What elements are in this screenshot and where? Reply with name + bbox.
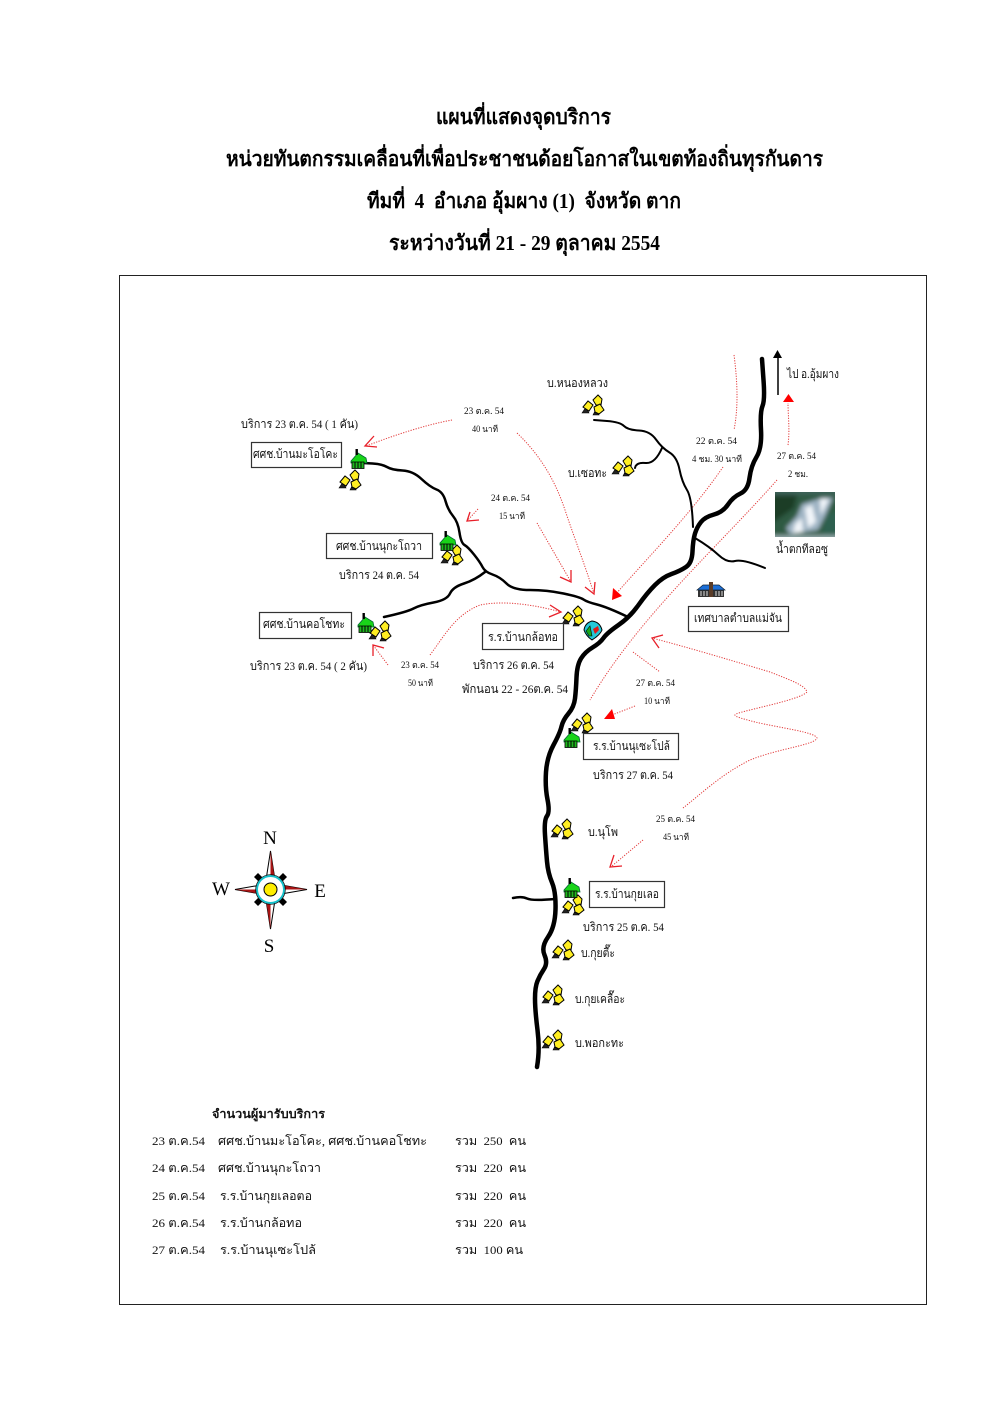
table row 27 Oct: ร.ร.บ้านนุเซะโปล้ <box>220 1243 316 1258</box>
icon: tent <box>584 621 602 640</box>
table heading: number of patients: จำนวนผู้มารับบริการ <box>212 1107 326 1122</box>
label box: Baan Nuka Thowa <box>326 534 432 558</box>
label: service 23 Oct car 1: บริการ 23 ต.ค. 54 ( 1 คัน) <box>241 417 358 431</box>
branch road: south west <box>513 897 555 900</box>
label box: Baan Klo Tho school: ร.ร.บ้านกล้อทอ <box>488 630 558 644</box>
village name labels: บ.พอกะทะ <box>575 1036 624 1050</box>
table row 23 Oct <box>152 1134 526 1148</box>
label: service 26 Oct: บริการ 26 ต.ค. 54 <box>473 658 554 672</box>
title <box>226 101 824 257</box>
travel time labels: 50 นาที <box>408 678 433 688</box>
travel time labels: 45 นาที <box>663 832 689 842</box>
title: แผนที่แสดงจุดบริการ <box>436 101 612 131</box>
table row 26 Oct: รวม 220 คน <box>455 1216 526 1230</box>
icon: municipal building <box>697 582 725 597</box>
label: waterfall: น้ำตกทีลอซู <box>776 540 828 557</box>
label box: Baan Ma O Kho <box>252 442 342 468</box>
label box: Baan Kho Cho Tha: ศศช.บ้านคอโชทะ <box>263 617 345 631</box>
label box: Baan Ma O Kho: ศศช.บ้านมะโอโคะ <box>253 447 338 461</box>
label box: Baan Nu Che Plo school: ร.ร.บ้านนุเซะโปล้ <box>593 739 670 754</box>
red dotted travel routes <box>365 355 817 867</box>
label box: Baan Klo Tho school <box>482 624 564 650</box>
arrow: to Umphang <box>773 350 782 395</box>
table row 27 Oct <box>152 1243 523 1258</box>
travel time labels: 24 ต.ค. 54 <box>491 493 530 503</box>
travel time labels: 23 ต.ค. 54 <box>401 660 439 670</box>
table row 27 Oct: รวม 100 คน <box>455 1243 523 1257</box>
icons: green clinic houses <box>351 449 580 898</box>
title: ระหว่างวันที่ 21 - 29 ตุลาคม 2554 <box>389 227 660 257</box>
branch road: Ban Soe Tha <box>635 448 662 468</box>
travel time labels: 27 ต.ค. 54 <box>777 451 816 461</box>
icons: village tents <box>339 395 634 1050</box>
branch road: to Baan Kho Cho Tha <box>384 572 485 617</box>
label box: Baan Nuka Thowa: ศศช.บ้านนุกะโถวา <box>336 539 422 554</box>
table row 25 Oct: ร.ร.บ้านกุยเลอตอ <box>220 1189 312 1204</box>
travel time labels: 25 ต.ค. 54 <box>656 814 695 824</box>
village name labels: บ.หนองหลวง <box>547 376 608 390</box>
travel time labels: 23 ต.ค. 54 <box>464 406 505 416</box>
label: service 25 Oct: บริการ 25 ต.ค. 54 <box>583 920 664 934</box>
label box: Baan Nu Che Plo school <box>584 734 678 760</box>
table row 24 Oct: รวม 220 คน <box>455 1161 526 1175</box>
table row 24 Oct <box>152 1161 526 1176</box>
label box: Baan Kho Cho Tha <box>260 612 352 638</box>
travel time labels <box>401 406 816 842</box>
icon: compass rose <box>212 828 326 957</box>
table row 26 Oct: 26 ต.ค.54 <box>152 1216 205 1230</box>
label box: Mae Chan municipality: เทศบาลตำบลแม่จัน <box>694 611 782 625</box>
label: service 23 Oct car 2: บริการ 23 ต.ค. 54 ( 2 คัน) <box>250 659 367 673</box>
table row 25 Oct: รวม 220 คน <box>455 1189 526 1203</box>
icon: compass rose: E <box>314 881 326 902</box>
panel: map frame <box>120 276 926 1304</box>
label box: Baan Kui Loe school <box>590 882 664 908</box>
travel time labels: 22 ต.ค. 54 <box>696 436 738 446</box>
table row 23 Oct: รวม 250 คน <box>455 1134 526 1148</box>
table row 25 Oct <box>152 1189 526 1204</box>
table row 24 Oct: ศศช.บ้านนุกะโถวา <box>218 1161 321 1176</box>
picture: waterfall <box>775 492 835 537</box>
title: หน่วยทันตกรรมเคลื่อนที่เพื่อประชาชนด้อยโอกาสในเขตท้องถิ่นทุรกันดาร <box>226 143 824 173</box>
village name labels <box>547 376 625 1050</box>
main road <box>535 359 764 1067</box>
travel time labels: 15 นาที <box>499 511 525 521</box>
label: service 27 Oct: บริการ 27 ต.ค. 54 <box>593 768 673 782</box>
travel time labels: 2 ชม. <box>788 469 808 479</box>
branch road: west side <box>363 463 628 617</box>
table row 23 Oct: ศศช.บ้านมะโอโคะ, ศศช.บ้านคอโชทะ <box>218 1134 427 1148</box>
label box: Baan Kui Loe school: ร.ร.บ้านกุยเลอ <box>595 887 659 902</box>
travel time labels: 40 นาที <box>472 424 498 434</box>
title: ทีมที่ 4 อำเภอ อุ้มผาง (1) จังหวัด ตาก <box>367 185 681 215</box>
village name labels: บ.กุยเคลื๊อะ <box>575 990 625 1007</box>
table row 23 Oct: 23 ต.ค.54 <box>152 1134 205 1148</box>
table row 24 Oct: 24 ต.ค.54 <box>152 1161 205 1175</box>
icon: compass rose: W <box>212 879 230 900</box>
icon: compass rose: N <box>263 828 277 849</box>
label box: Mae Chan municipality <box>688 606 788 632</box>
travel time labels: 10 นาที <box>644 696 670 706</box>
label: service 24 Oct: บริการ 24 ต.ค. 54 <box>339 568 419 582</box>
village name labels: บ.นุโพ <box>588 825 618 840</box>
label: to Umphang: ไป อ.อุ้มผาง <box>786 367 839 382</box>
table row 27 Oct: 27 ต.ค.54 <box>152 1243 205 1257</box>
label: overnight stay: พักนอน 22 - 26ต.ค. 54 <box>462 682 568 696</box>
travel time labels: 27 ต.ค. 54 <box>636 678 675 688</box>
travel time labels: 4 ชม. 30 นาที <box>692 454 742 464</box>
table row 25 Oct: 25 ต.ค.54 <box>152 1189 205 1203</box>
icon: compass rose: S <box>264 936 274 957</box>
branch road: north villages <box>594 420 693 527</box>
table row 26 Oct: ร.ร.บ้านกล้อทอ <box>220 1216 302 1230</box>
table row 26 Oct <box>152 1216 526 1230</box>
branch road: waterfall <box>695 538 765 568</box>
village name labels: บ.เซอทะ <box>568 466 607 480</box>
village name labels: บ.กุยตื๊ะ <box>581 944 615 961</box>
